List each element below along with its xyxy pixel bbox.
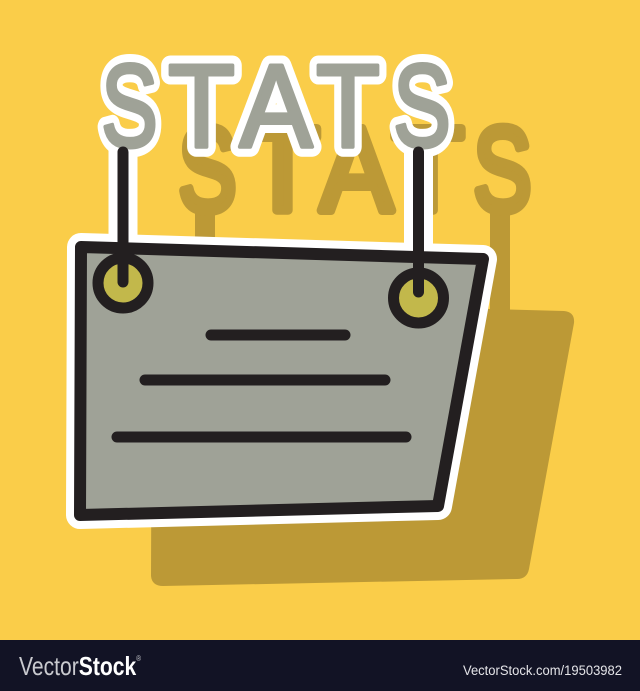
title: white outline: T bbox=[168, 40, 235, 172]
shadow: word bbox=[178, 104, 532, 236]
title: gray letters: S bbox=[101, 40, 158, 172]
title: gray letters: T bbox=[316, 40, 380, 172]
shadow: word: S bbox=[474, 104, 532, 236]
footer: image URL: VectorStock.com/19503982 bbox=[463, 663, 622, 678]
footer bar bbox=[0, 640, 640, 691]
title: white outline: T bbox=[316, 40, 380, 172]
title: white outline: A bbox=[240, 40, 313, 172]
shadow: word: T bbox=[246, 104, 320, 236]
shadow: word: T bbox=[392, 104, 464, 236]
title: white outline: S bbox=[101, 40, 158, 172]
title: white outline bbox=[101, 40, 451, 172]
shadow: sign, strings and word bbox=[151, 104, 574, 586]
sign board bbox=[80, 247, 483, 515]
title: STATS bbox=[101, 40, 451, 172]
shadow: word: S bbox=[178, 104, 236, 236]
line 2 bbox=[145, 374, 385, 386]
shadow: strings bbox=[195, 210, 510, 320]
left eyelet and string bbox=[98, 152, 148, 308]
line 3 bbox=[117, 432, 406, 442]
shadow: word: A bbox=[320, 104, 393, 236]
title: gray letters: A bbox=[240, 40, 313, 172]
title: gray letters: S bbox=[393, 40, 451, 172]
footer: VectorStock logo: ® bbox=[136, 654, 141, 663]
footer: VectorStock logo: VectorStock bbox=[19, 651, 150, 681]
title: gray letters bbox=[101, 40, 451, 172]
white sticker outline: strings bbox=[123, 140, 418, 270]
title: white outline: S bbox=[393, 40, 451, 172]
line 1 bbox=[211, 330, 345, 340]
text lines on the sign bbox=[117, 335, 406, 437]
board: gray panel bbox=[80, 247, 483, 515]
board: white outline bbox=[80, 247, 483, 515]
title: gray letters: T bbox=[168, 40, 235, 172]
right eyelet and string bbox=[394, 152, 444, 323]
shadow: board bbox=[151, 300, 574, 586]
